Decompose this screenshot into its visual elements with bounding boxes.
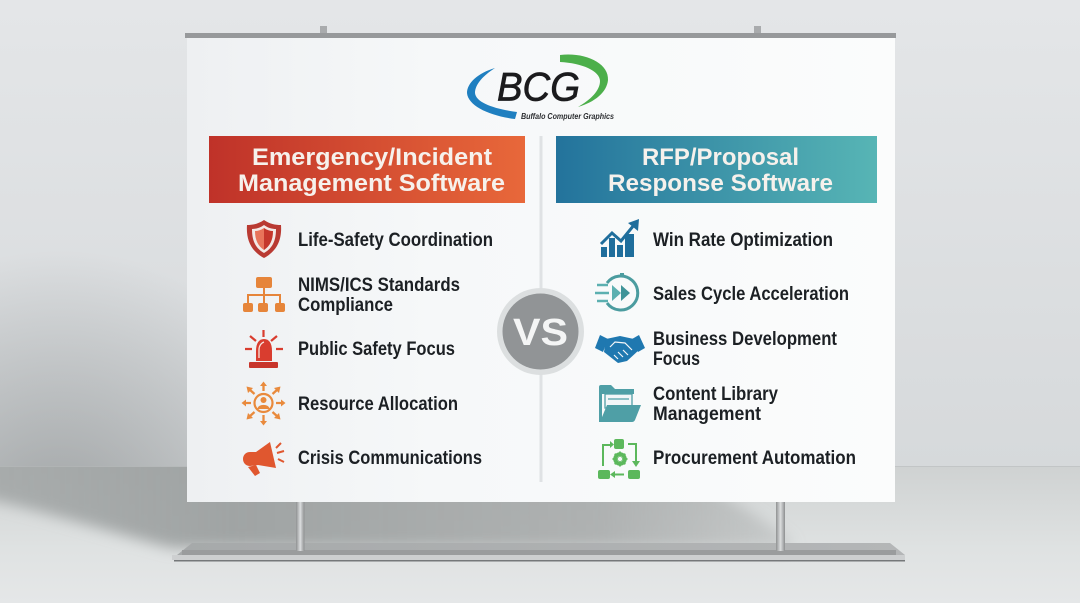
right header banner bbox=[556, 136, 877, 203]
left header banner: Management Software bbox=[238, 170, 505, 197]
item: content library management: Management bbox=[653, 403, 761, 425]
item: life-safety coordination bbox=[247, 220, 493, 258]
item: content library management: Content Library bbox=[653, 383, 778, 405]
item: NIMS/ICS standards compliance bbox=[243, 274, 460, 316]
item: NIMS/ICS standards compliance: NIMS/ICS Standards bbox=[298, 274, 460, 296]
item: crisis communications: Crisis Communications bbox=[298, 447, 482, 469]
VS badge: VS bbox=[513, 312, 568, 354]
BCG logo bbox=[467, 55, 614, 121]
item: business development focus: Focus bbox=[653, 348, 700, 370]
item: content library management bbox=[599, 383, 778, 425]
BCG logo: Buffalo Computer Graphics bbox=[521, 111, 614, 121]
left header banner bbox=[209, 136, 525, 203]
center divider line bbox=[540, 136, 542, 482]
right header banner: Response Software bbox=[608, 170, 833, 197]
item: sales cycle acceleration bbox=[595, 273, 849, 310]
item: win rate optimization: Win Rate Optimization bbox=[653, 229, 833, 251]
item: resource allocation bbox=[242, 382, 458, 426]
background: wall and floor bbox=[0, 260, 1080, 556]
item: procurement automation: Procurement Automation bbox=[653, 447, 856, 469]
VS badge bbox=[497, 288, 584, 375]
BCG logo: BCG bbox=[497, 66, 580, 110]
stand: posts and base bbox=[172, 502, 905, 562]
signboard panel bbox=[187, 38, 895, 502]
item: crisis communications bbox=[243, 442, 482, 476]
left list bbox=[242, 220, 493, 476]
item: business development focus: Business Development bbox=[653, 328, 837, 350]
item: resource allocation: Resource Allocation bbox=[298, 393, 458, 415]
right header banner: RFP/Proposal bbox=[642, 144, 799, 171]
item: win rate optimization bbox=[601, 219, 833, 257]
item: NIMS/ICS standards compliance: Compliance bbox=[298, 294, 393, 316]
item: business development focus bbox=[595, 328, 837, 370]
item: public safety focus: Public Safety Focus bbox=[298, 338, 455, 360]
right list bbox=[595, 219, 856, 479]
board clips and top rail bbox=[185, 26, 896, 38]
left header banner: Emergency/Incident bbox=[252, 144, 492, 171]
item: life-safety coordination: Life-Safety Coordination bbox=[298, 229, 493, 251]
item: sales cycle acceleration: Sales Cycle Acceleration bbox=[653, 283, 849, 305]
item: procurement automation bbox=[598, 439, 856, 479]
item: public safety focus bbox=[245, 330, 455, 368]
